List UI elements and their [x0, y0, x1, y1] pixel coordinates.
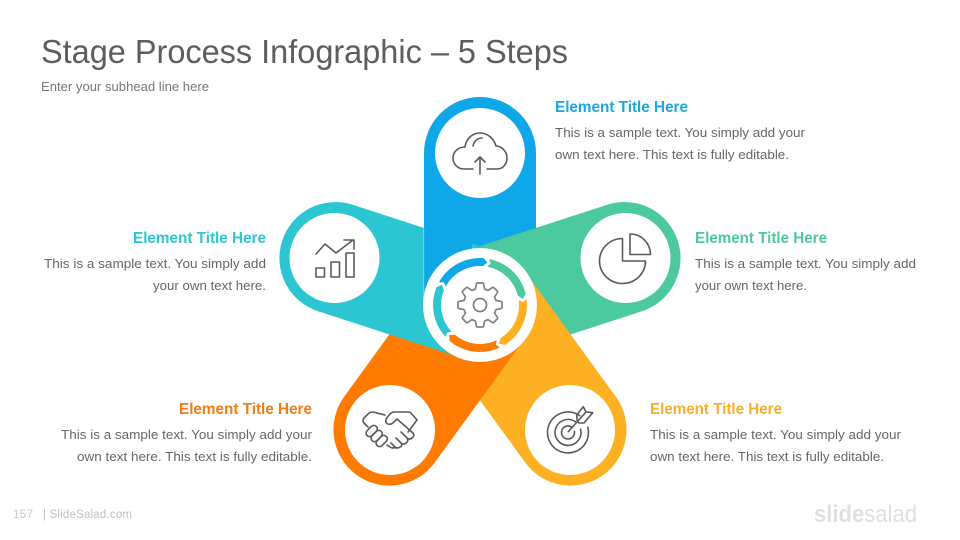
petal: teal: [265, 187, 497, 358]
text block: orange step: own text here. This text is fully editable.: [77, 449, 312, 464]
text block: yellow step: This is a sample text. You simply add your: [650, 427, 902, 442]
text block: yellow step: own text here. This text is fully editable.: [650, 449, 884, 464]
text block: teal step: Element Title Here: [133, 230, 266, 247]
text block: blue step: Element Title Here: [555, 99, 688, 116]
text block: orange step: [61, 401, 313, 464]
text block: green step: [695, 230, 916, 293]
footer: page number and site: | SlideSalad.com: [43, 509, 132, 521]
text block: green step: your own text here.: [695, 278, 807, 293]
logo wordmark: slidesalad: [814, 501, 917, 528]
petal: yellow: [435, 272, 649, 508]
text block: blue step: [555, 99, 806, 162]
cycle ring arrows: [423, 252, 540, 366]
text block: orange step: Element Title Here: [179, 401, 312, 418]
footer: page number and site: 157: [13, 509, 33, 521]
text block: blue step: own text here. This text is fully editable.: [555, 147, 789, 162]
petal: blue overlap over teal: [424, 200, 472, 310]
text block: yellow step: [650, 401, 902, 464]
petal: orange: [311, 272, 525, 508]
five-petal diagram: [265, 97, 695, 508]
text block: teal step: [44, 230, 266, 293]
text block: orange step: This is a sample text. You simply add your: [61, 427, 313, 442]
text block: green step: Element Title Here: [695, 230, 827, 247]
subhead: Enter your subhead line here: [41, 79, 209, 94]
text block: green step: This is a sample text. You simply add: [695, 256, 916, 271]
text block: blue step: This is a sample text. You simply add your: [555, 125, 806, 140]
title: Stage Process Infographic – 5 Steps: [41, 33, 568, 70]
icon disc: cloud upload: [435, 108, 525, 198]
icon disc: target: [525, 385, 615, 475]
text block: yellow step: Element Title Here: [650, 401, 782, 418]
centre white disc: [423, 248, 537, 362]
petal: green: [463, 187, 695, 358]
text block: teal step: This is a sample text. You simply add: [44, 256, 266, 271]
icon: gear: [458, 283, 502, 327]
icon disc: handshake: [345, 385, 435, 475]
icon disc: pie chart: [580, 213, 670, 303]
text block: teal step: your own text here.: [153, 278, 266, 293]
petal: blue: [424, 97, 536, 305]
icon disc: growth chart: [290, 213, 380, 303]
